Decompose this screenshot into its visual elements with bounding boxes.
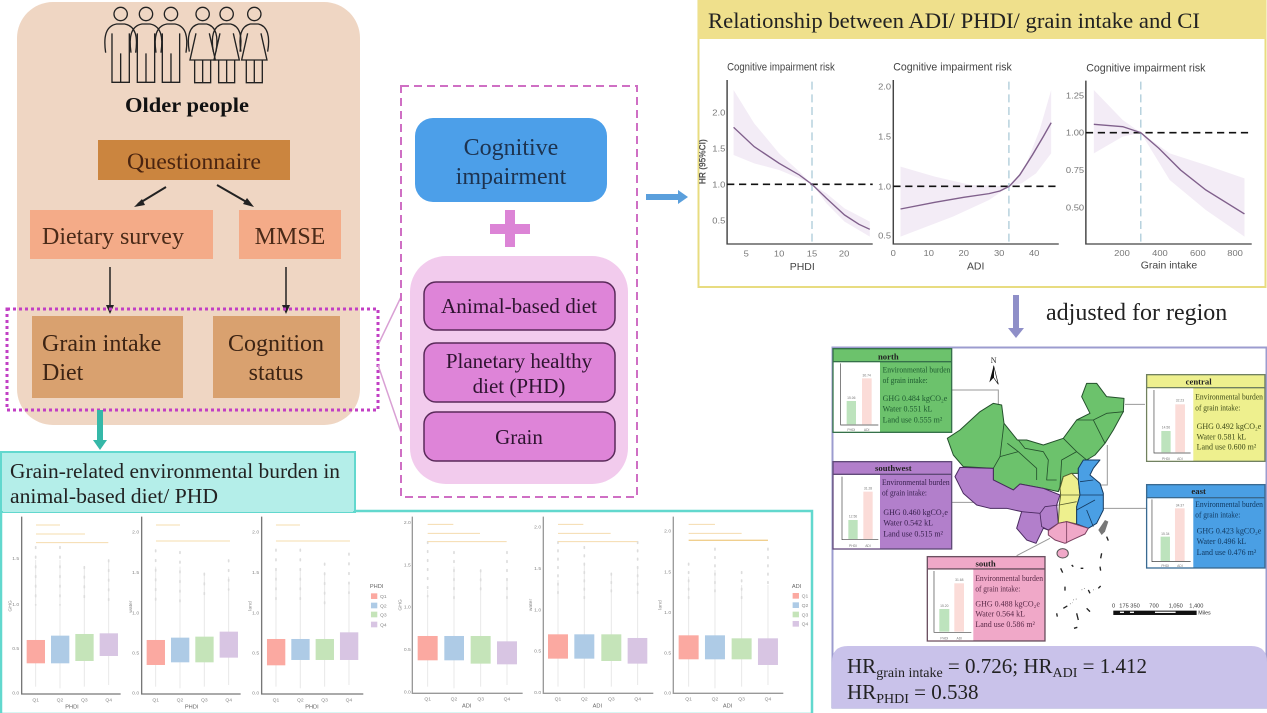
callout: north: PHDI bbox=[847, 428, 855, 432]
boxplot: water by ADI: Q3 bbox=[608, 697, 615, 703]
map: China regions bbox=[947, 383, 1124, 628]
legend: ADI: Q3 bbox=[802, 612, 809, 618]
chart: grain intake risk curve: 1.00 bbox=[1066, 128, 1084, 138]
boxplot: water by ADI bbox=[528, 517, 653, 709]
panel: relationship between ADI PHDI grain intake and CI bbox=[697, 0, 1266, 287]
callout: south bbox=[927, 557, 1045, 641]
connector lines to diet panel bbox=[378, 297, 401, 432]
region: central bbox=[1058, 473, 1080, 524]
chart: ADI risk curve: ADI bbox=[967, 262, 984, 272]
legend: PHDI: Q2 bbox=[380, 603, 387, 609]
panel: regional map bbox=[832, 348, 1267, 708]
callout: southwest: PHDI bbox=[849, 544, 857, 548]
chart: grain intake risk curve: Grain intake bbox=[1141, 261, 1198, 272]
callout: central: PHDI bbox=[1162, 457, 1170, 461]
callout: southwest: of grain intake: bbox=[882, 489, 927, 498]
heading: grain-related environmental burden: Grain-related environmental burden in bbox=[10, 459, 341, 483]
panel: grain-related environmental burden bbox=[1, 452, 812, 713]
boxplot: water by ADI: Q2 bbox=[581, 697, 588, 703]
box: cognition status: status bbox=[249, 360, 303, 386]
boxplot: land by ADI: 1.5 bbox=[664, 569, 671, 575]
boxplot: water by ADI: 2.0 bbox=[534, 525, 541, 531]
callout: north: GHG 0.484 kgCO₂e bbox=[883, 394, 948, 403]
callout: east: Land use 0.476 m² bbox=[1197, 548, 1257, 557]
boxplot: GHG by ADI: 1.0 bbox=[404, 605, 411, 611]
callout: south: 31.68 bbox=[955, 578, 964, 582]
boxplot: GHG by PHDI: Q2 bbox=[57, 697, 64, 703]
boxplot: land by ADI: 1.0 bbox=[664, 610, 671, 616]
heading: relationship bbox=[698, 0, 1266, 39]
callout: central: of grain intake: bbox=[1195, 403, 1240, 412]
callout: south: Environmental burden bbox=[975, 574, 1043, 583]
boxplot: GHG by PHDI: 1.0 bbox=[12, 602, 19, 608]
callout: southwest: Water 0.542 kL bbox=[883, 519, 933, 528]
callout: southwest: southwest bbox=[875, 463, 912, 473]
box: cognitive impairment bbox=[415, 118, 607, 202]
legend: PHDI: Q1 bbox=[380, 594, 387, 600]
boxplot: GHG by PHDI: Q1 bbox=[32, 697, 39, 703]
box: MMSE: MMSE bbox=[255, 224, 325, 250]
boxplot: land by ADI bbox=[658, 517, 783, 709]
callout: east: Water 0.496 kL bbox=[1197, 537, 1246, 546]
boxplot: land by ADI: Q3 bbox=[738, 697, 745, 703]
boxplot: GHG by ADI: ADI bbox=[462, 703, 472, 709]
box: planetary healthy diet: diet (PHD) bbox=[473, 374, 565, 398]
icon: older people group bbox=[105, 7, 269, 83]
boxplot: GHG by ADI: 1.5 bbox=[404, 563, 411, 569]
chart: ADI risk curve: 0 bbox=[891, 248, 896, 258]
arrow: to cognition status bbox=[282, 267, 290, 314]
callout: central: 32.23 bbox=[1176, 399, 1184, 403]
islands bbox=[1057, 537, 1108, 628]
callout: southwest: 31.28 bbox=[864, 487, 872, 491]
boxplot: water by PHDI: Q1 bbox=[152, 697, 159, 703]
summary: hazard ratios: = 0.726; HR bbox=[943, 654, 1053, 678]
arrow: to grain intake diet bbox=[106, 267, 114, 314]
boxplot: land by PHDI: land bbox=[248, 601, 254, 611]
boxplot: land by ADI: 0.0 bbox=[664, 691, 671, 697]
callout: central bbox=[1147, 375, 1265, 461]
boxplot: water by PHDI: 1.5 bbox=[132, 570, 139, 576]
arrow: to dietary survey bbox=[134, 187, 166, 207]
callout: east bbox=[1147, 485, 1265, 568]
boxplot: water by PHDI: Q3 bbox=[201, 697, 208, 703]
boxplot: GHG by ADI bbox=[398, 517, 523, 709]
callout: central: ADI bbox=[1177, 457, 1183, 461]
chart: ADI risk curve: 1.0 bbox=[878, 182, 891, 191]
icon: north arrow bbox=[989, 356, 998, 384]
callout: east: of grain intake: bbox=[1195, 511, 1240, 520]
boxplot: GHG by ADI: 0.0 bbox=[404, 689, 411, 695]
boxplot: water by PHDI bbox=[128, 517, 241, 711]
panel: exposures and outcome bbox=[401, 86, 637, 497]
boxplot: land by ADI: 2.0 bbox=[664, 529, 671, 535]
callout: east: east bbox=[1191, 486, 1206, 496]
box: dietary survey: Dietary survey bbox=[42, 224, 184, 250]
boxplot: water by PHDI: water bbox=[128, 600, 134, 613]
scale bar: 1,050 bbox=[1169, 603, 1183, 609]
callout: south: Water 0.564 kL bbox=[975, 609, 1025, 618]
box: cognition status: Cognition bbox=[228, 331, 324, 357]
summary: hazard ratios: ADI bbox=[1053, 666, 1078, 681]
callout: central: 14.56 bbox=[1162, 426, 1170, 430]
boxplot: land by PHDI: 0.0 bbox=[252, 691, 259, 697]
panel: study design bbox=[17, 2, 360, 425]
scale bar: 700 bbox=[1149, 603, 1159, 609]
callout: south: of grain intake: bbox=[975, 585, 1020, 594]
axis label: HR: HR (95%CI) bbox=[697, 139, 707, 184]
boxplot: land by PHDI: 2.0 bbox=[252, 529, 259, 535]
boxplot: GHG by PHDI: Q3 bbox=[81, 697, 88, 703]
callout: southwest: Land use 0.515 m² bbox=[883, 530, 944, 539]
boxplot: land by PHDI bbox=[248, 517, 363, 711]
boxplot: water by PHDI: 2.0 bbox=[132, 529, 139, 535]
province borders bbox=[993, 412, 1124, 543]
arrow: to MMSE bbox=[217, 185, 254, 207]
boxplot: GHG by ADI: Q4 bbox=[504, 697, 511, 703]
scale bar bbox=[1112, 603, 1211, 616]
chart: ADI risk curve bbox=[878, 62, 1059, 272]
box: MMSE bbox=[239, 210, 341, 259]
legend: PHDI: Q4 bbox=[380, 622, 387, 628]
callout: central: GHG 0.492 kgCO₂e bbox=[1197, 422, 1262, 431]
callout: north: Water 0.551 kL bbox=[883, 404, 932, 413]
callout: southwest: 12.56 bbox=[849, 515, 857, 519]
box: grain: Grain bbox=[495, 425, 543, 449]
boxplot: land by PHDI: Q3 bbox=[321, 697, 328, 703]
boxplot: water by PHDI: 1.0 bbox=[132, 611, 139, 617]
chart: PHDI risk curve: 1.5 bbox=[712, 144, 725, 153]
chart: grain intake risk curve: 800 bbox=[1227, 248, 1243, 258]
boxplot: land by PHDI: 1.5 bbox=[252, 570, 259, 576]
box: animal-based diet bbox=[424, 282, 615, 330]
box: questionnaire: Questionnaire bbox=[127, 149, 261, 174]
callout: east: PHDI bbox=[1161, 564, 1169, 568]
box: questionnaire bbox=[98, 140, 290, 180]
callout: north: Land use 0.555 m² bbox=[883, 415, 943, 424]
boxplot: land by PHDI: 0.5 bbox=[252, 650, 259, 656]
chart: grain intake risk curve: 0.75 bbox=[1066, 165, 1084, 175]
callout: southwest: ADI bbox=[865, 544, 871, 548]
callout: east: Environmental burden bbox=[1195, 500, 1263, 509]
boxplot: GHG by ADI: 0.5 bbox=[404, 647, 411, 653]
chart: ADI risk curve: Cognitive impairment risk bbox=[893, 62, 1012, 74]
boxplot: land by PHDI: PHDI bbox=[305, 705, 319, 711]
boxplot: GHG by ADI: 2.0 bbox=[404, 520, 411, 526]
boxplot: GHG by PHDI bbox=[7, 517, 121, 711]
callout: south: GHG 0.488 kgCO₂e bbox=[975, 599, 1040, 608]
box: cognition status bbox=[213, 316, 340, 398]
chart: PHDI risk curve bbox=[712, 62, 873, 273]
boxplot: GHG by PHDI: 0.0 bbox=[12, 690, 19, 696]
callout: southwest: GHG 0.460 kgCO₂e bbox=[883, 508, 948, 517]
scale bar: 0 bbox=[1112, 603, 1115, 609]
chart: PHDI risk curve: 2.0 bbox=[712, 108, 725, 117]
chart: ADI risk curve: 10 bbox=[923, 248, 934, 258]
boxplot: land by ADI: Q1 bbox=[685, 697, 692, 703]
chart: PHDI risk curve: 5 bbox=[744, 249, 749, 259]
boxplot: land by PHDI: Q2 bbox=[297, 697, 304, 703]
boxplot: water by ADI: 0.5 bbox=[534, 649, 541, 655]
chart: grain intake risk curve bbox=[1066, 63, 1253, 272]
arrow: lavender down bbox=[1008, 295, 1024, 338]
callout: north: ADI bbox=[864, 428, 870, 432]
box: planetary healthy diet: Planetary healthy bbox=[446, 349, 593, 373]
callout: southwest: Environmental burden bbox=[882, 478, 950, 487]
box: dietary survey bbox=[30, 210, 213, 259]
boxplot: water by PHDI: 0.0 bbox=[132, 691, 139, 697]
chart: grain intake risk curve: 400 bbox=[1152, 248, 1168, 258]
region: southwest bbox=[955, 467, 1060, 543]
chart: grain intake risk curve: Cognitive impairment risk bbox=[1086, 63, 1206, 74]
callout: south: 15.20 bbox=[940, 604, 949, 608]
scale bar: Miles bbox=[1198, 610, 1211, 616]
legend: ADI: Q1 bbox=[802, 594, 809, 600]
callout: south: PHDI bbox=[940, 637, 948, 641]
callout: north: 15.06 bbox=[847, 396, 856, 400]
boxplot: water by PHDI: 0.5 bbox=[132, 650, 139, 656]
box: grain intake diet bbox=[32, 316, 183, 398]
boxplot: water by ADI: Q1 bbox=[555, 697, 562, 703]
scale bar: 1,400 bbox=[1189, 603, 1203, 609]
callout: east: 34.37 bbox=[1176, 503, 1184, 507]
boxplot: land by ADI: Q4 bbox=[765, 697, 772, 703]
chart: PHDI risk curve: 0.5 bbox=[712, 216, 725, 226]
boxplot: water by ADI: 1.5 bbox=[534, 566, 541, 572]
legend: PHDI: PHDI bbox=[370, 584, 384, 590]
legend: ADI: ADI bbox=[792, 584, 802, 590]
callout: north: 30.74 bbox=[862, 373, 871, 377]
legend: ADI: Q2 bbox=[802, 603, 809, 609]
box: animal-based diet: Animal-based diet bbox=[441, 294, 597, 318]
callout: north: Environmental burden bbox=[883, 365, 950, 374]
region: north bbox=[947, 383, 1124, 492]
scale bar: 175 350 bbox=[1119, 603, 1140, 609]
heading: grain-related environmental burden bbox=[1, 452, 355, 512]
chart: ADI risk curve: 0.5 bbox=[878, 231, 891, 241]
chart: ADI risk curve: 40 bbox=[1029, 248, 1039, 258]
boxplot: land by PHDI: 1.0 bbox=[252, 611, 259, 617]
icon: north arrow: N bbox=[991, 356, 997, 365]
callout: southwest bbox=[833, 462, 952, 549]
chart: PHDI risk curve: 20 bbox=[839, 249, 849, 259]
legend: PHDI bbox=[370, 584, 387, 628]
chart: ADI risk curve: 2.0 bbox=[878, 82, 891, 92]
summary: hazard ratios: grain intake bbox=[876, 666, 943, 681]
box: grain bbox=[424, 412, 615, 461]
chart: PHDI risk curve: Cognitive impairment risk bbox=[727, 62, 835, 74]
heading: grain-related environmental burden: animal-based diet/ PHD bbox=[10, 484, 218, 508]
callout: central: Water 0.581 kL bbox=[1197, 432, 1246, 441]
boxplot: GHG by PHDI: GHG bbox=[7, 600, 13, 612]
region: Hainan bbox=[1057, 549, 1068, 558]
chart: grain intake risk curve: 600 bbox=[1190, 248, 1206, 258]
callout: north: of grain intake: bbox=[883, 376, 928, 385]
summary: hazard ratios: = 0.538 bbox=[909, 680, 978, 704]
callout: central: central bbox=[1186, 376, 1212, 386]
boxplot: water by ADI: Q4 bbox=[634, 697, 641, 703]
boxplot: water by PHDI: Q4 bbox=[225, 697, 232, 703]
box: grain intake diet: Grain intake bbox=[42, 331, 161, 357]
text: adjusted for region: adjusted for region bbox=[1046, 300, 1227, 326]
callout: east: ADI bbox=[1177, 564, 1183, 568]
callout: north bbox=[833, 349, 952, 432]
region: east bbox=[1077, 460, 1103, 528]
heading: older people: Older people bbox=[125, 93, 249, 117]
box: cognitive impairment: impairment bbox=[456, 164, 567, 190]
chart: PHDI risk curve: 10 bbox=[774, 249, 784, 259]
boxplot: GHG by ADI: Q2 bbox=[451, 697, 458, 703]
chart: PHDI risk curve: 15 bbox=[807, 249, 817, 259]
region: Taiwan bbox=[1098, 520, 1108, 535]
chart: PHDI risk curve: 1.0 bbox=[712, 180, 725, 189]
callout: east: GHG 0.423 kgCO₂e bbox=[1197, 527, 1262, 536]
boxplot: land by ADI: 0.5 bbox=[664, 651, 671, 657]
boxplot: water by ADI: water bbox=[528, 599, 534, 611]
callout: central: Land use 0.600 m² bbox=[1197, 443, 1257, 452]
boxplot: GHG by PHDI: PHDI bbox=[65, 705, 79, 711]
boxplot: GHG by PHDI: Q4 bbox=[105, 697, 112, 703]
callout: south: ADI bbox=[957, 637, 962, 641]
summary: hazard ratios: HR bbox=[847, 680, 876, 704]
boxplot: water by ADI: 1.0 bbox=[534, 607, 541, 613]
arrow: teal down bbox=[93, 410, 107, 450]
boxplot: GHG by ADI: Q1 bbox=[424, 697, 431, 703]
boxplot: land by PHDI: Q4 bbox=[346, 697, 353, 703]
boxplot: land by ADI: Q2 bbox=[712, 697, 719, 703]
boxplot: GHG by PHDI: 1.5 bbox=[12, 556, 19, 562]
icon: plus bbox=[490, 210, 530, 247]
heading: relationship: Relationship between ADI/ PHDI/ grain intake and CI bbox=[708, 8, 1200, 33]
region: south bbox=[1048, 522, 1088, 543]
box: grain intake diet: Diet bbox=[42, 360, 84, 386]
legend: ADI: Q4 bbox=[802, 622, 809, 628]
boxplot: water by ADI: 0.0 bbox=[534, 690, 541, 696]
boxplot: GHG by PHDI: 0.5 bbox=[12, 646, 19, 652]
chart: grain intake risk curve: 0.50 bbox=[1066, 203, 1084, 212]
callout: east: 15.34 bbox=[1161, 532, 1170, 536]
box: cognitive impairment: Cognitive bbox=[464, 135, 558, 161]
legend: PHDI: Q3 bbox=[380, 613, 387, 619]
callout: south: Land use 0.586 m² bbox=[975, 620, 1036, 629]
connector lines bbox=[952, 390, 1147, 556]
callout: south: south bbox=[976, 558, 996, 568]
chart: ADI risk curve: 30 bbox=[994, 248, 1004, 258]
arrow: blue right bbox=[646, 190, 688, 204]
summary: hazard ratios bbox=[832, 646, 1267, 708]
boxplot: GHG by ADI: GHG bbox=[398, 599, 404, 611]
summary: hazard ratios: PHDI bbox=[876, 692, 909, 707]
chart: ADI risk curve: 20 bbox=[959, 248, 969, 258]
boxplot: GHG by ADI: Q3 bbox=[477, 697, 484, 703]
boxplot: land by ADI: ADI bbox=[723, 703, 733, 709]
summary: hazard ratios: = 1.412 bbox=[1077, 654, 1147, 678]
chart: PHDI risk curve: PHDI bbox=[790, 262, 815, 273]
boxplot: land by PHDI: Q1 bbox=[273, 697, 280, 703]
callout: central: Environmental burden bbox=[1195, 393, 1263, 402]
callout: north: north bbox=[878, 351, 899, 361]
dotted highlight around outcomes bbox=[7, 309, 378, 410]
box: planetary healthy diet bbox=[424, 343, 615, 402]
boxplot: water by PHDI: Q2 bbox=[177, 697, 184, 703]
boxplot: land by ADI: land bbox=[658, 600, 664, 610]
boxplot: water by PHDI: PHDI bbox=[185, 705, 199, 711]
chart: grain intake risk curve: 1.25 bbox=[1066, 91, 1084, 101]
summary: hazard ratios: HR bbox=[847, 654, 876, 678]
chart: grain intake risk curve: 200 bbox=[1114, 248, 1130, 258]
legend: ADI bbox=[792, 584, 809, 628]
chart: ADI risk curve: 1.5 bbox=[878, 132, 891, 141]
panel: diet types bbox=[410, 256, 628, 484]
boxplot: water by ADI: ADI bbox=[593, 703, 602, 709]
